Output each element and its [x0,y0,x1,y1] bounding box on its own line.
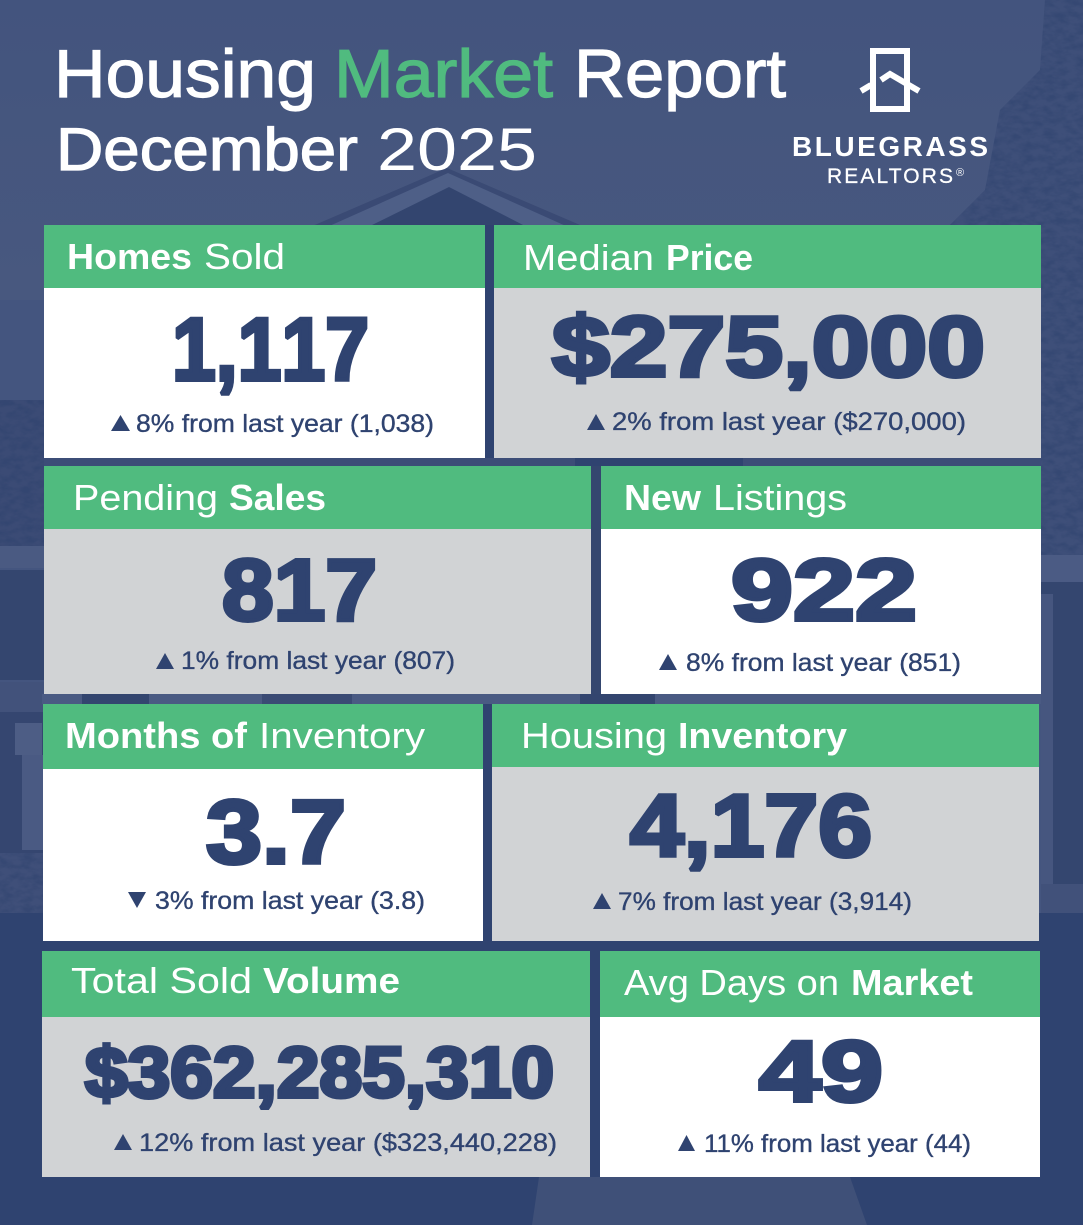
panel gaps [42,225,1041,1177]
roof gable [280,168,615,240]
panel: total sold volume: Total Sold [71,960,252,1001]
title: Housing [54,36,316,112]
panel: median price: Price [666,237,753,278]
right tree [950,0,1083,560]
title: December [56,116,358,183]
icon: house [861,51,919,109]
right porch [1041,555,1083,914]
logo: Bluegrass Realtors: REALTORS [827,165,953,188]
title: 2025 [377,116,537,183]
panel: housing inventory: 4,176 [630,776,872,875]
panel: pending sales [44,466,591,694]
logo: Bluegrass Realtors [792,51,988,188]
panel: total sold volume: Volume [263,960,400,1001]
panel: homes sold: 1,117 [172,299,369,399]
logo: Bluegrass Realtors: ® [956,167,964,179]
title: Market [334,36,553,112]
panel: months of inventory: 3.7 [206,783,346,883]
panel: total sold volume [42,951,590,1177]
logo: Bluegrass Realtors: BLUEGRASS [792,131,988,162]
panel: new listings: 922 [731,542,917,639]
panel: average days on market [600,951,1040,1177]
panel: months of inventory: Months of [65,715,248,756]
title [54,36,786,183]
panel: housing inventory: Housing [521,715,667,756]
panel: homes sold: Homes [67,236,192,277]
panel: new listings: Listings [713,477,847,518]
panel: median price: Median [523,237,654,278]
panel: pending sales: 817 [222,542,377,639]
panel: pending sales: Pending [73,477,218,518]
panel: new listings: New [624,477,702,518]
panel: housing inventory [492,704,1039,941]
panel: average days on market: Avg Days on [624,962,839,1003]
panel: months of inventory: 3% from last year (3.8) [155,887,425,915]
panel: homes sold [44,225,485,458]
panel: pending sales: 1% from last year (807) [181,647,455,675]
ground [0,913,1083,1225]
panel: new listings: 8% from last year (851) [686,649,961,677]
panel: months of inventory [43,704,483,941]
panel: average days on market: 11% from last year (44) [704,1130,971,1158]
title: Report [574,36,786,112]
panel: pending sales: Sales [229,477,326,518]
panel: housing inventory: Inventory [678,715,847,756]
panel: total sold volume: 12% from last year ($323,440,228) [139,1129,557,1157]
panel: median price: 2% from last year ($270,000) [612,408,966,436]
panel: average days on market: 49 [759,1024,883,1120]
panel: average days on market: Market [851,962,973,1003]
panel: housing inventory: 7% from last year (3,914) [618,888,912,916]
panel: months of inventory: Inventory [259,715,425,756]
panel: total sold volume: $362,285,310 [85,1034,554,1113]
panel: new listings [601,466,1041,694]
panel: homes sold: 8% from last year (1,038) [136,410,434,438]
left trees [0,400,44,913]
panel: homes sold: Sold [204,236,285,277]
panel: median price: $275,000 [552,300,985,395]
panel: median price [494,225,1041,458]
